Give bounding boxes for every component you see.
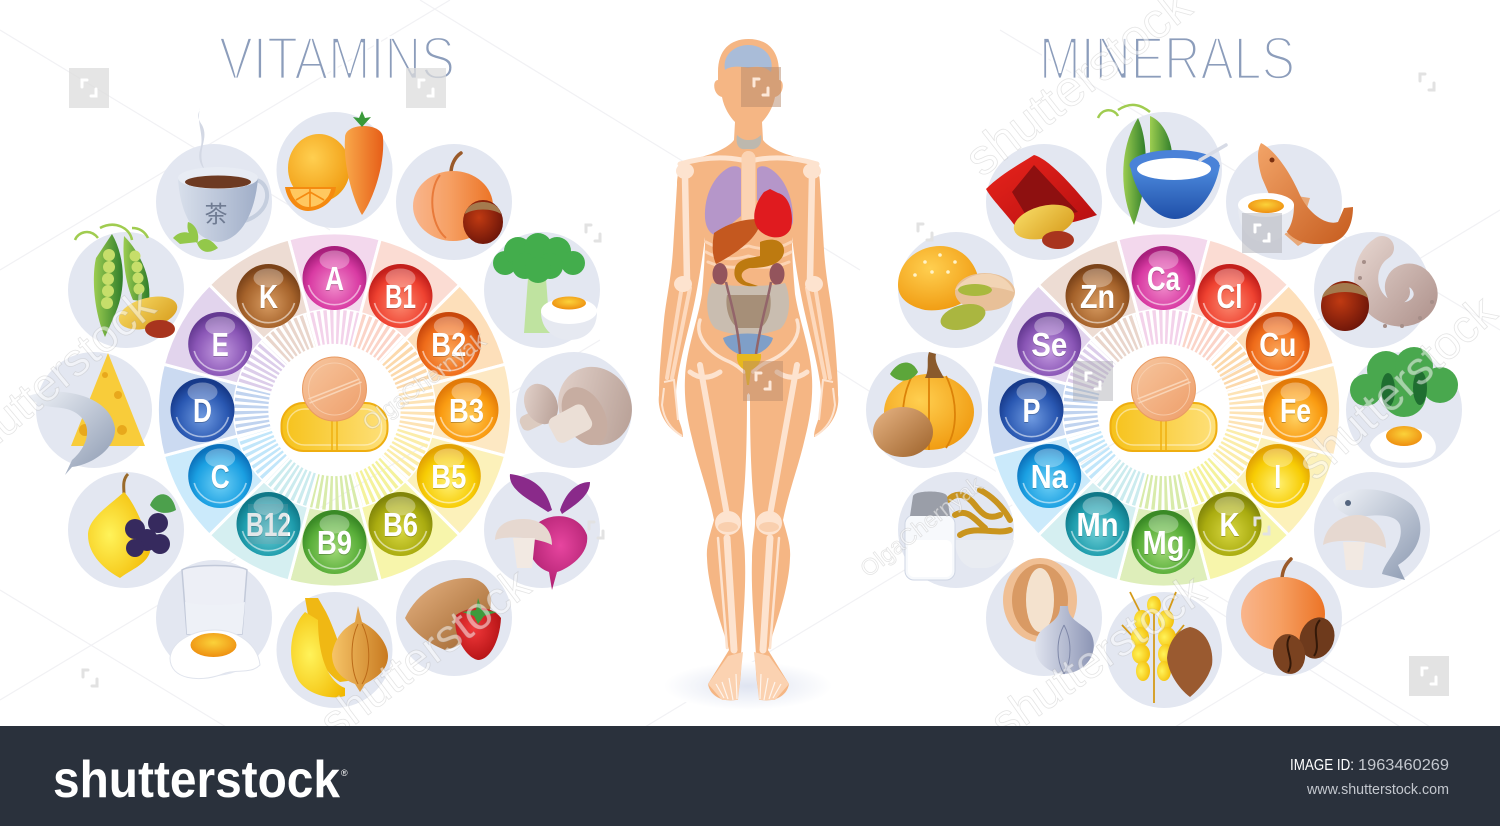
food: lemon and blackcurrant	[68, 472, 184, 588]
ball: chlorine: Cl	[1216, 278, 1242, 315]
image id number: 1963460269	[1358, 757, 1449, 774]
food: peas and cottage cheese bowl	[1098, 105, 1226, 228]
food: peas and peanut	[68, 225, 184, 348]
ball: vitamin B9: B9	[317, 524, 352, 561]
watermark: shutterstock texts: shutterstock	[981, 563, 1215, 748]
organ: small intestine	[726, 295, 771, 328]
food: banana and onion	[276, 592, 392, 708]
ball: iron: Fe	[1280, 392, 1311, 429]
watermark: shutterstock texts: shutterstock	[310, 557, 540, 748]
ball: vitamin A: A	[325, 260, 344, 297]
food: octopus and hazelnut	[1314, 232, 1434, 348]
ball: vitamin D: D	[193, 392, 212, 429]
organ: liver	[713, 219, 760, 264]
icon: tablet and capsule	[1110, 357, 1216, 451]
ball: chlorine	[1198, 264, 1262, 328]
title: vitamins: VITAMINS	[219, 25, 455, 92]
organ: thyroid	[737, 135, 761, 149]
food: wheat and almond	[1106, 592, 1222, 708]
organ: large intestine	[707, 283, 789, 335]
ball: vitamin B5: B5	[431, 458, 466, 495]
ball: vitamin A	[302, 246, 366, 310]
ball: iodine	[1246, 444, 1310, 508]
ball: vitamin B1: B1	[385, 278, 416, 315]
food: orange and carrot	[276, 111, 392, 228]
organ: brain	[725, 45, 772, 72]
food: beet and mushroom	[484, 472, 600, 590]
ball: vitamin B2	[417, 312, 481, 376]
wheel sectors	[157, 233, 512, 587]
watermark: shutterstock texts: OlgaChernyak	[855, 471, 987, 582]
ball: zinc	[1066, 264, 1130, 328]
registered mark: ®	[341, 768, 348, 778]
organ: bladder	[737, 354, 761, 385]
icon: tablet and capsule	[282, 357, 388, 451]
food: bun and pistachio	[898, 232, 1015, 348]
food: almond and garlic	[986, 558, 1102, 676]
footer logo: shutterstock	[53, 751, 340, 809]
ball: potassium	[1198, 492, 1262, 556]
ball: vitamin D	[170, 378, 234, 442]
ball: vitamin B12: B12	[246, 506, 291, 543]
ball: potassium: K	[1220, 506, 1240, 543]
ball: magnesium: Mg	[1142, 524, 1184, 561]
organ: kidneys	[712, 263, 784, 285]
ball: iron	[1264, 378, 1328, 442]
ball: vitamin B6: B6	[383, 506, 418, 543]
floor shadow	[664, 662, 832, 710]
title: minerals: MINERALS	[1039, 25, 1295, 92]
wheel rays	[251, 327, 418, 493]
panel: minerals wheel	[986, 233, 1341, 587]
panel: human body with organs	[659, 39, 838, 710]
ball: vitamin B2: B2	[431, 326, 466, 363]
watermark: stamp squares	[69, 67, 1449, 696]
kanji: tea: 茶	[204, 201, 228, 227]
ball: copper: Cu	[1259, 326, 1296, 363]
food: red bag and peanut	[986, 144, 1102, 260]
footer bar	[0, 726, 1500, 826]
food: trout and egg	[1226, 143, 1353, 260]
food: greens and egg	[1346, 347, 1462, 468]
food: tea cup	[156, 108, 272, 260]
organ: lungs	[705, 166, 793, 235]
food: mushrooms	[508, 352, 646, 468]
wheel sectors	[986, 233, 1341, 587]
ball: vitamin K	[236, 264, 300, 328]
ball: vitamin K: K	[259, 278, 278, 315]
food: apricot and coffee beans	[1226, 559, 1342, 676]
organ: heart	[754, 189, 792, 237]
body right half	[748, 39, 838, 700]
ball: vitamin B9	[302, 510, 366, 574]
food: fish and mushroom	[1314, 472, 1430, 588]
ball: vitamin B6	[368, 492, 432, 556]
ball: vitamin B5	[417, 444, 481, 508]
food: broccoli and egg	[484, 232, 600, 348]
ball: magnesium	[1132, 510, 1196, 574]
ball: manganese	[1066, 492, 1130, 556]
ball: selenium	[1017, 312, 1081, 376]
organ: ureters	[726, 282, 771, 354]
ball: vitamin B12	[236, 492, 300, 556]
body left half	[659, 39, 748, 700]
ball: vitamin B1	[368, 264, 432, 328]
ball: vitamin C: C	[211, 458, 230, 495]
ball: vitamin C	[188, 444, 252, 508]
ball: copper	[1246, 312, 1310, 376]
food: salt and pasta	[898, 472, 1014, 588]
ball: vitamin B3	[434, 378, 498, 442]
ball: manganese: Mn	[1076, 506, 1118, 543]
panel: vitamins wheel	[157, 233, 512, 587]
ball: phosphorus	[1000, 378, 1064, 442]
ball: iodine: I	[1274, 458, 1281, 495]
ball: calcium: Ca	[1147, 260, 1181, 297]
image id label: IMAGE ID:	[1290, 757, 1354, 774]
food: pumpkin and walnut	[866, 352, 982, 468]
ball: phosphorus: P	[1022, 392, 1040, 429]
ball: vitamin B3: B3	[449, 392, 484, 429]
ball: sodium: Na	[1031, 458, 1068, 495]
food: cheese and fish	[28, 352, 152, 475]
watermark: small outline marks	[83, 74, 1434, 686]
watermark: shutterstock texts: shutterstock	[1287, 284, 1500, 489]
ball: vitamin E: E	[212, 326, 229, 363]
organ: pelvis muscle	[723, 334, 773, 356]
food: walnut and strawberry	[396, 560, 512, 676]
ball: calcium	[1132, 246, 1196, 310]
watermark: shutterstock texts: OlgaChernyak	[357, 326, 491, 436]
ball: sodium	[1017, 444, 1081, 508]
organ: stomach	[734, 240, 784, 286]
wheel rays	[1080, 327, 1247, 493]
website: www.shutterstock.com	[1306, 782, 1449, 798]
ball: selenium: Se	[1031, 326, 1067, 363]
food: fried egg and milk	[156, 560, 272, 679]
ball: zinc: Zn	[1080, 278, 1115, 315]
ball: vitamin E	[188, 312, 252, 376]
food: peach and hazelnut	[396, 144, 512, 260]
